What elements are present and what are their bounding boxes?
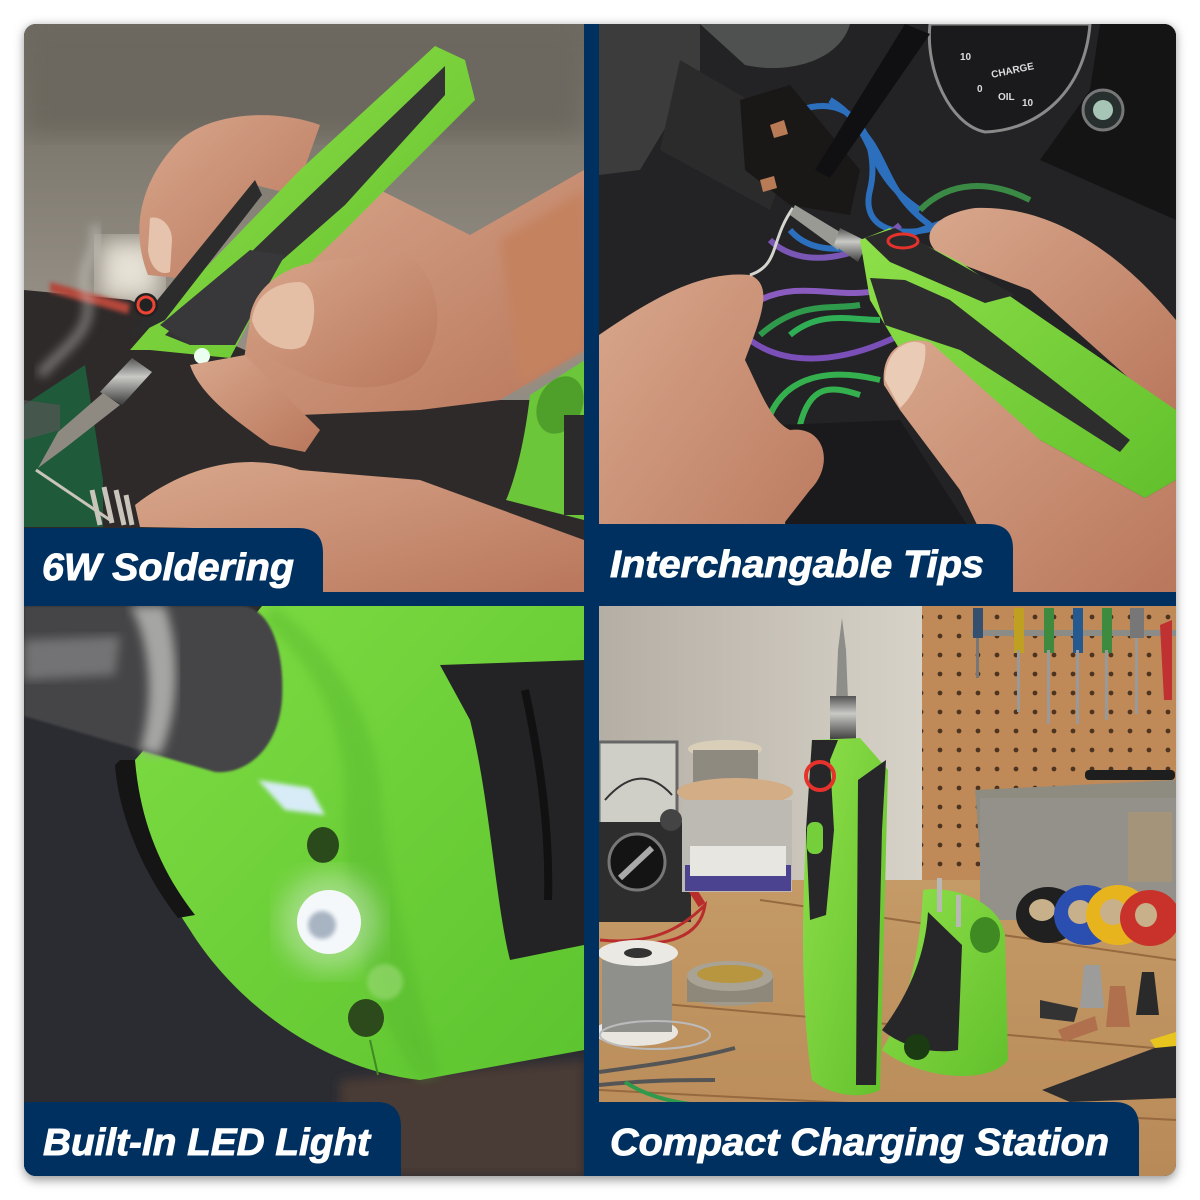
- LED: [280, 872, 380, 972]
- soldering iron body: [130, 46, 475, 358]
- panel: built-in LED light photo: [24, 606, 584, 1176]
- label: Compact Charging Station: [585, 1102, 1139, 1176]
- thumb: [250, 263, 436, 387]
- switch block: [740, 85, 860, 215]
- pliers: [1042, 1040, 1176, 1102]
- pegboard: [922, 606, 1176, 886]
- multimeter: [599, 742, 677, 824]
- metal tip: [100, 358, 152, 405]
- foam block: [783, 420, 966, 524]
- label: Compact Charging Station: Compact Charging Station: [610, 1122, 1109, 1164]
- iron body: [860, 228, 1176, 498]
- solder spool: [594, 1018, 678, 1046]
- upper screw hole: [307, 827, 339, 863]
- middle finger: [190, 355, 320, 452]
- panel: interchangeable tips photo: [599, 24, 1176, 592]
- shading on green: [262, 606, 440, 1080]
- black grip: [440, 660, 584, 960]
- solder wire coil: [92, 487, 132, 525]
- left hand: [599, 274, 824, 524]
- circuit board: [24, 365, 103, 527]
- second hand: [135, 462, 584, 592]
- gauge labels: 10: [1022, 98, 1034, 109]
- gauge labels: 10: [960, 52, 972, 63]
- coloured wires: [750, 100, 1030, 425]
- gauge labels: CHARGE: [990, 61, 1035, 81]
- label: Built-In LED Light: Built-In LED Light: [43, 1122, 371, 1164]
- green housing: [134, 606, 584, 1080]
- tape rolls: [1016, 887, 1080, 943]
- stand in background: [506, 360, 585, 520]
- wire connectors: [1080, 965, 1104, 1008]
- index finger: [139, 115, 320, 278]
- reflection highlight: [258, 780, 325, 815]
- LED glow on iron: [194, 348, 210, 364]
- solder wire: [750, 208, 793, 275]
- panel: compact charging station photo: [594, 606, 1180, 1176]
- hanging tools: [972, 608, 1176, 724]
- wires on table: [599, 1048, 735, 1085]
- lower screw hole: [348, 999, 384, 1037]
- iron body upright: [803, 738, 888, 1095]
- solder wire loop: [600, 1021, 710, 1049]
- dark workbench: [24, 290, 584, 540]
- spools: [688, 740, 762, 758]
- metal collar: [24, 606, 282, 772]
- screwdriver: [815, 24, 930, 178]
- flux tin: [687, 978, 773, 1006]
- wood table: [599, 880, 1176, 1176]
- charging stand: [882, 889, 1008, 1076]
- test leads: [600, 905, 705, 943]
- gauge labels: OIL: [998, 92, 1015, 103]
- gauge labels: 0: [977, 84, 983, 95]
- forearm and palm: [240, 170, 584, 415]
- steering column: [599, 24, 700, 175]
- gauge labels: [960, 52, 1035, 109]
- iron tip upright: [836, 618, 848, 700]
- label: Built-In LED Light: [24, 1102, 401, 1176]
- label: 6W Soldering: 6W Soldering: [42, 547, 294, 589]
- panel: 6W soldering photo: [24, 24, 593, 592]
- label: 6W Soldering: [24, 528, 323, 592]
- solder smoke: [40, 225, 96, 375]
- gauges: [700, 24, 850, 68]
- label: Interchangable Tips: [585, 524, 1013, 592]
- right hand: [929, 208, 1176, 420]
- thumb and lower hand: [884, 340, 1176, 592]
- metal toolbox: [975, 780, 1176, 920]
- iron tip: [790, 205, 839, 250]
- label: Interchangable Tips: Interchangable Tips: [610, 544, 984, 586]
